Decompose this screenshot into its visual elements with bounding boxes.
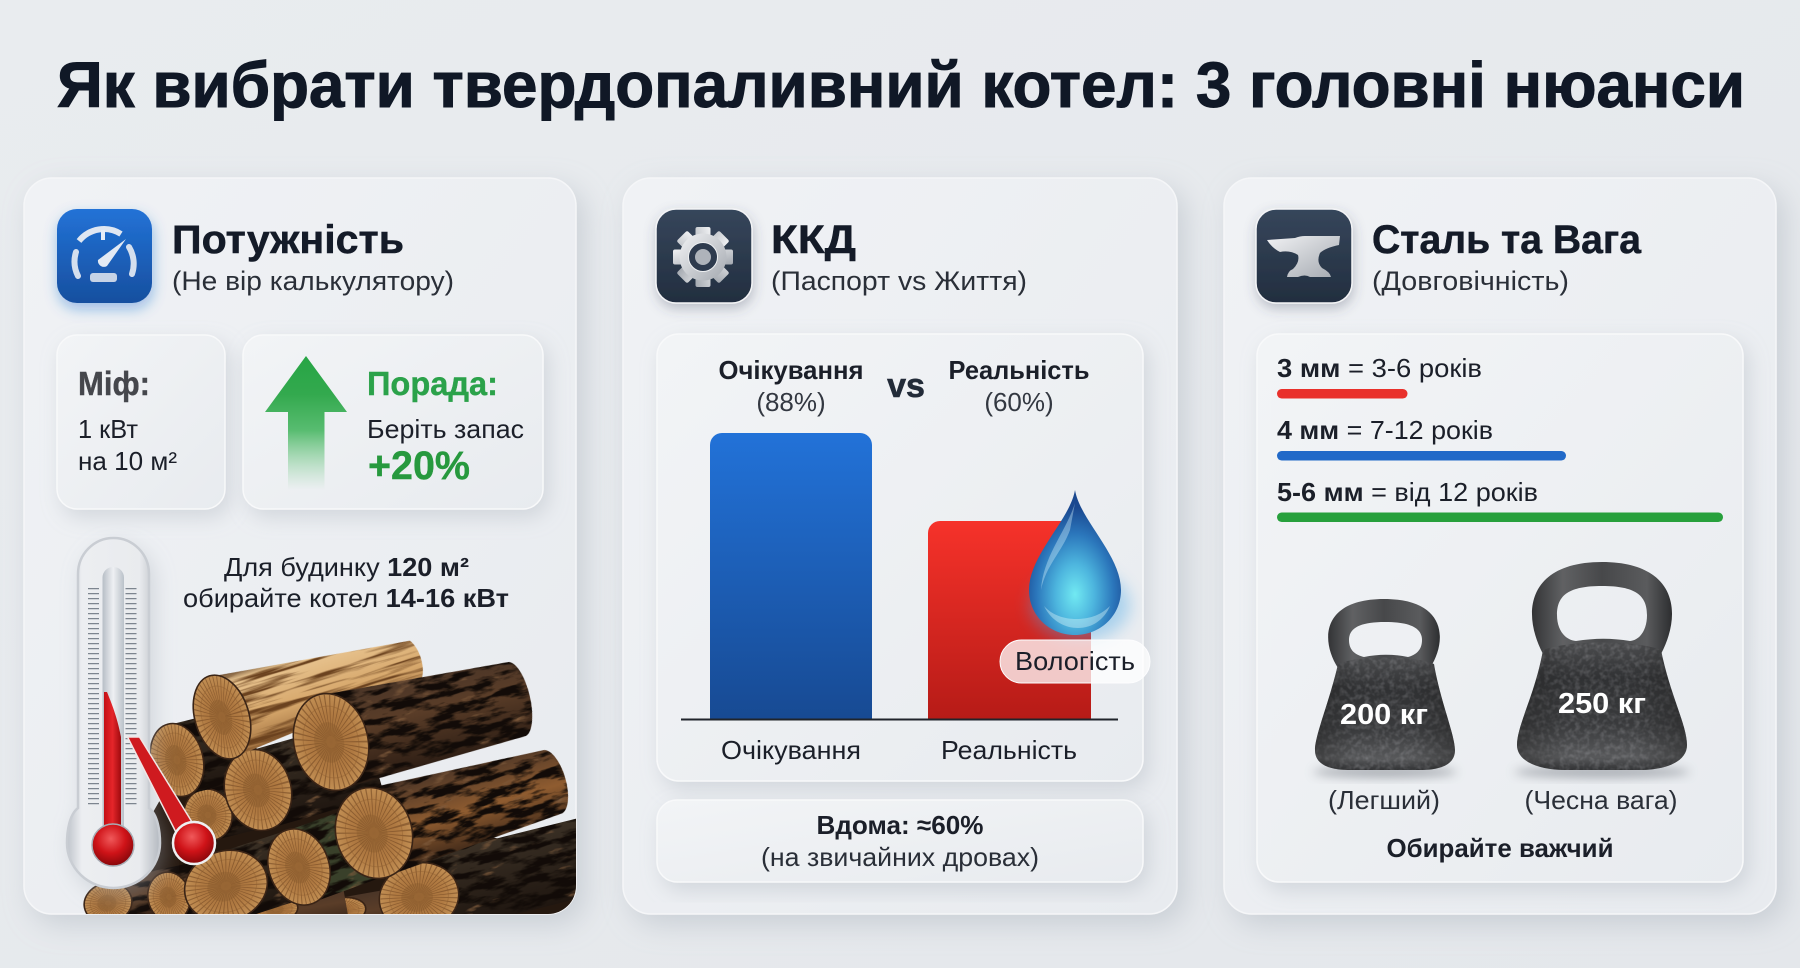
icon: thermometer pointer bulb [173, 822, 215, 864]
subtitle: power: (Не вір калькулятору) [172, 266, 454, 296]
conclusion: Обирайте важчий [1386, 833, 1614, 863]
icon: gear [656, 209, 752, 303]
axis labels: Очікування [721, 735, 861, 765]
panel: power [24, 178, 592, 932]
card: tip: +20% [368, 444, 470, 488]
chart heading: Очікування [718, 355, 864, 385]
text: house recommendation [183, 552, 509, 613]
axis labels [721, 735, 1077, 765]
caption: lighter: (Легший) [1328, 785, 1440, 815]
inner panel: thickness and weight [1257, 334, 1743, 882]
note: at home: Вдома: ≈60% [816, 810, 984, 840]
bar: reality [928, 521, 1091, 719]
heading: steel: Сталь та Вага [1372, 218, 1642, 262]
row: 4 mm [1277, 415, 1566, 460]
note: at home: (на звичайних дровах) [761, 842, 1039, 872]
card: tip: Беріть запас [367, 414, 524, 444]
card: tip: Порада: [367, 365, 498, 402]
illustration: firewood pile [83, 640, 576, 914]
label: moisture pill [1000, 640, 1150, 683]
text: house recommendation: Для будинку 120 м² [224, 552, 469, 582]
axis labels: Реальність [941, 735, 1077, 765]
panel: efficiency [623, 178, 1177, 914]
panel: steel and weight [1224, 178, 1776, 914]
chart heading: (60%) [984, 387, 1054, 417]
icon: thermometer [67, 538, 215, 888]
chart heading: vs [887, 367, 925, 405]
chart heading: Реальність [948, 355, 1090, 385]
icon: thermometer pointer [128, 737, 200, 850]
icon: water drop [1029, 490, 1130, 641]
heading: efficiency: ККД [771, 218, 856, 262]
icon: large kettlebell boiler [1514, 562, 1690, 778]
row: 3 mm [1277, 353, 1482, 398]
row: 4 mm: 4 мм = 7-12 років [1277, 415, 1493, 445]
row: 3 mm: 3 мм = 3-6 років [1277, 353, 1482, 383]
chart heading [718, 355, 1090, 417]
card: myth [57, 335, 225, 509]
row: 5-6 mm: 5-6 мм = від 12 років [1277, 477, 1538, 507]
row: 5-6 mm [1277, 477, 1723, 522]
label: moisture pill: Вологість [1015, 646, 1135, 676]
chart panel: expectation vs reality [657, 334, 1150, 781]
card: tip [243, 335, 543, 509]
subtitle: efficiency: (Паспорт vs Життя) [771, 266, 1027, 296]
chart heading: (88%) [756, 387, 826, 417]
note: at home [657, 800, 1143, 882]
heading: power: Потужність [172, 218, 404, 262]
card: myth: Міф: [78, 365, 150, 402]
icon: speedometer [57, 209, 152, 303]
icon: up arrow [265, 356, 347, 490]
icon: anvil [1256, 209, 1352, 303]
icon: large kettlebell boiler: 250 кг [1558, 688, 1646, 720]
icon: small kettlebell boiler: 200 кг [1340, 699, 1428, 731]
caption: honest weight: (Чесна вага) [1524, 785, 1678, 815]
title: Як вибрати твердопаливний котел: 3 головні нюанси [57, 49, 1745, 121]
text: house recommendation: обирайте котел 14-16 кВт [183, 583, 509, 613]
subtitle: steel: (Довговічність) [1372, 266, 1569, 296]
icon: small kettlebell boiler [1313, 599, 1457, 778]
card: myth: на 10 м² [78, 446, 177, 476]
card: myth: 1 кВт [78, 414, 138, 444]
bar: expectation [710, 433, 872, 719]
